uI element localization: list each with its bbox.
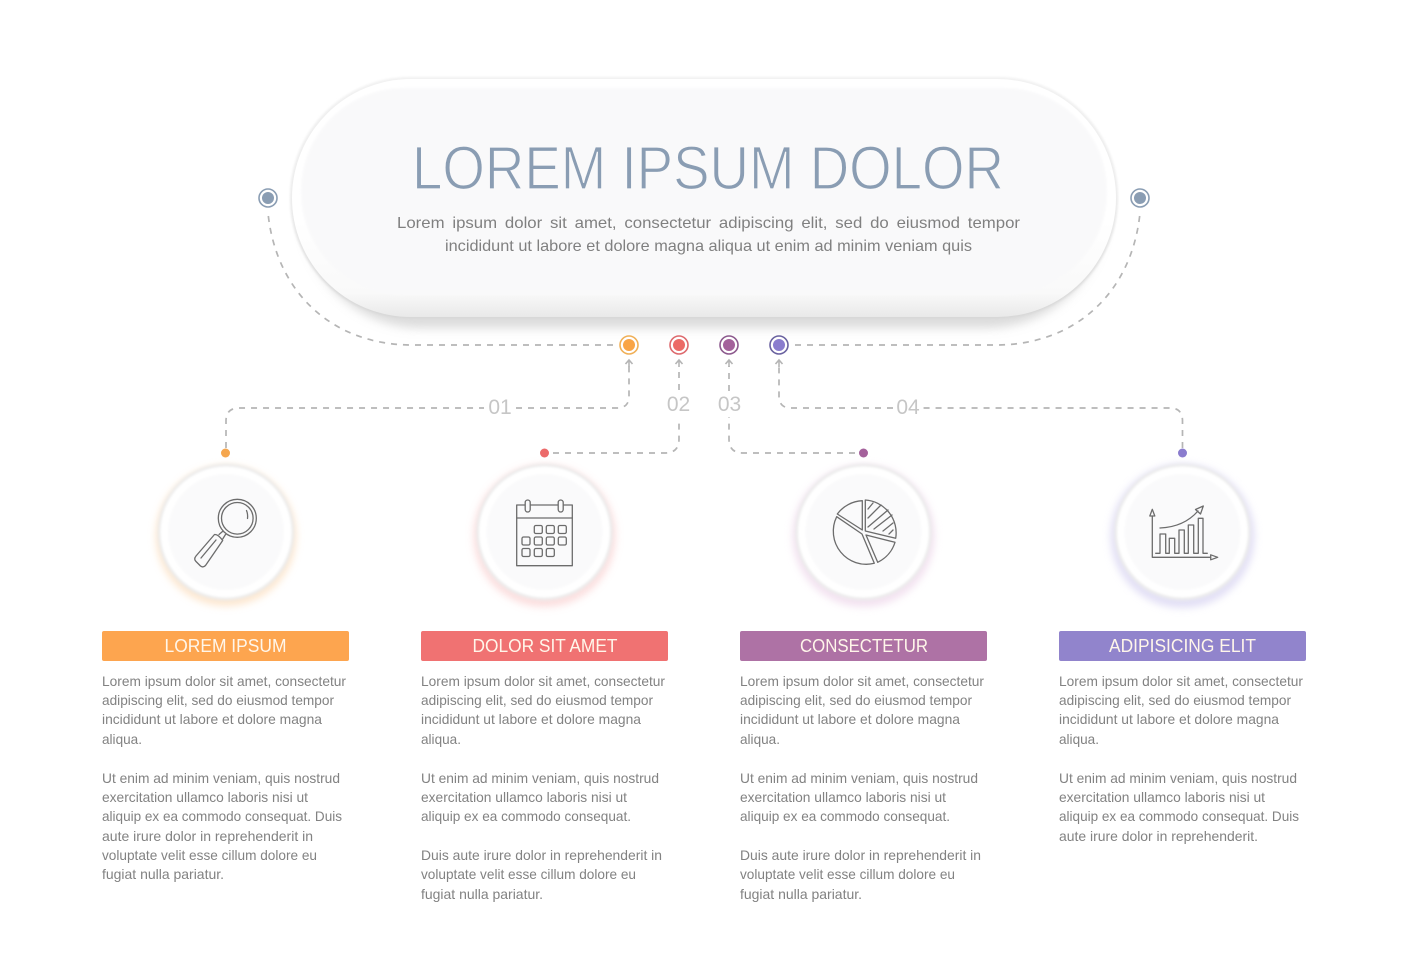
heading bar 4 [1059,631,1306,661]
subtitle [397,215,1021,255]
column 2 text: fugiat nulla pariatur. [421,887,543,902]
column 2 text: adipiscing elit, sed do eiusmod tempor [421,693,653,708]
column 1 text: Ut enim ad minim veniam, quis nostrud [102,771,340,786]
circle badge 2 [474,464,616,607]
column 4 text: aliqua. [1059,732,1099,747]
column 2 text: Ut enim ad minim veniam, quis nostrud [421,771,659,786]
connector 02 [540,360,690,458]
column 2 text: Duis aute irure dolor in reprehenderit in [421,848,662,863]
circle badge 3 [792,464,934,607]
connector 02: 02 [667,393,690,416]
column 4 text: incididunt ut labore et dolore magna [1059,712,1279,727]
icon: calendar [517,500,572,566]
icon: magnifying glass [195,499,256,567]
column 4 text: Ut enim ad minim veniam, quis nostrud [1059,771,1297,786]
column 1 text: Lorem ipsum dolor sit amet, consectetur [102,674,346,689]
header pill panel [290,77,1118,328]
heading bar 2: DOLOR SIT AMET [472,636,618,656]
column 3 text: Ut enim ad minim veniam, quis nostrud [740,771,978,786]
column 1 text: aute irure dolor in reprehenderit in [102,829,313,844]
circle badge 1 [156,464,296,606]
column 2 text: incididunt ut labore et dolore magna [421,712,641,727]
node 02 [670,336,688,354]
connector 01 [221,360,632,458]
column 1 text: incididunt ut labore et dolore magna [102,712,322,727]
column 3 text: adipiscing elit, sed do eiusmod tempor [740,693,972,708]
left curved dashed connector [268,213,613,345]
left side node [259,189,277,207]
column 2 text: aliquip ex ea commodo consequat. [421,809,631,824]
connector 04: 04 [896,396,920,419]
column 4 text: Lorem ipsum dolor sit amet, consectetur [1059,674,1303,689]
column 3 text: voluptate velit esse cillum dolore eu [740,867,955,882]
node 01 [620,336,638,354]
connector 03 [718,360,868,458]
column 4 text: aliquip ex ea commodo consequat. Duis [1059,809,1299,824]
subtitle: incididunt ut labore et dolore magna aliqua ut enim ad minim veniam quis [445,238,972,255]
heading bar 3: CONSECTETUR [800,636,928,656]
column 3 text [740,674,984,902]
column 4 text: exercitation ullamco laboris nisi ut [1059,790,1265,805]
right curved dashed connector [795,213,1140,345]
column 4 text: adipiscing elit, sed do eiusmod tempor [1059,693,1291,708]
column 2 text: voluptate velit esse cillum dolore eu [421,867,636,882]
column 3 text: exercitation ullamco laboris nisi ut [740,790,946,805]
subtitle: Lorem ipsum dolor sit amet, consectetur adipiscing elit, sed do eiusmod tempor [397,215,1021,232]
connector 01: 01 [488,396,512,419]
column 2 text: Lorem ipsum dolor sit amet, consectetur [421,674,665,689]
heading bar 1 [102,631,349,661]
icon: growth chart [1150,506,1218,560]
icon: pie chart [833,500,896,564]
column 2 text: aliqua. [421,732,461,747]
column 1 text: exercitation ullamco laboris nisi ut [102,790,308,805]
circle badge 4 [1110,464,1254,608]
column 1 text: aliquip ex ea commodo consequat. Duis [102,809,342,824]
heading bar 3 [740,631,987,661]
column 1 text [102,674,346,882]
column 2 text: exercitation ullamco laboris nisi ut [421,790,627,805]
heading bar 2 [421,631,668,661]
node 03 [720,336,738,354]
title: LOREM IPSUM DOLOR [412,134,1004,202]
column 3 text: Lorem ipsum dolor sit amet, consectetur [740,674,984,689]
column 4 text [1059,674,1303,844]
column 3 text: aliqua. [740,732,780,747]
column 1 text: aliqua. [102,732,142,747]
connector 04 [776,360,1187,458]
heading bar 4: ADIPISICING ELIT [1109,636,1256,656]
column 1 text: fugiat nulla pariatur. [102,867,224,882]
column 1 text: voluptate velit esse cillum dolore eu [102,848,317,863]
column 4 text: aute irure dolor in reprehenderit. [1059,829,1258,844]
right side node [1131,189,1149,207]
node 04 [770,336,788,354]
column 3 text: fugiat nulla pariatur. [740,887,862,902]
heading bar 1: LOREM IPSUM [164,636,286,656]
column 1 text: adipiscing elit, sed do eiusmod tempor [102,693,334,708]
column 2 text [421,674,665,902]
column 3 text: aliquip ex ea commodo consequat. [740,809,950,824]
connector 03: 03 [718,393,741,416]
column 3 text: incididunt ut labore et dolore magna [740,712,960,727]
column 3 text: Duis aute irure dolor in reprehenderit in [740,848,981,863]
